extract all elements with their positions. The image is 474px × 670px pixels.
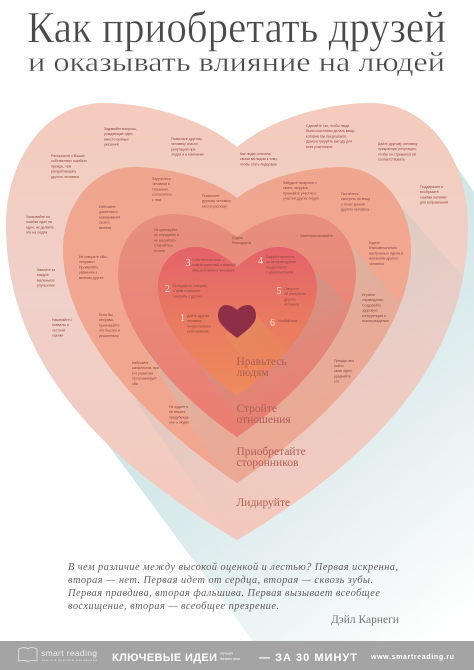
label: win allies: сторонников xyxy=(236,457,299,469)
quote author: Дэйл Карнеги xyxy=(331,614,399,626)
title xyxy=(27,3,446,77)
quote: вторая — нет. Первая идет от сердца, вторая — сквозь зубы. xyxy=(68,575,373,586)
rules 1 to 6: о себе и начните xyxy=(173,289,200,293)
text: second ring notes: Проявляйте xyxy=(79,265,99,269)
text: second ring notes: своего xyxy=(99,221,110,225)
footer slogan: www.smartreading.ru xyxy=(370,654,454,661)
text: second ring notes: Создавайте xyxy=(362,303,381,307)
text: second ring notes: оба xyxy=(132,382,138,386)
label: build relationships: отношения xyxy=(236,414,291,426)
panel: outer heart, lead xyxy=(6,103,468,540)
rules 1 to 6: люди ответят xyxy=(266,265,288,269)
text: outer ring notes: раскритиковать xyxy=(51,170,76,174)
text: outer ring notes: людях и в компании xyxy=(171,153,204,157)
text: second ring notes: Заручитесь xyxy=(152,177,171,181)
text: third ring notes: Будьте xyxy=(232,236,243,240)
icon: core heart xyxy=(218,305,256,338)
text: second ring notes: Избегайте xyxy=(132,361,149,365)
text: second ring notes: навязывания xyxy=(99,215,120,219)
text: second ring notes: благожелательно xyxy=(369,246,397,250)
text: outer ring notes: своим взглядом к тому, xyxy=(240,157,278,161)
text: second ring notes: с точки зрения xyxy=(341,202,365,206)
text: second ring notes: Не судите и xyxy=(169,405,188,409)
text: outer ring notes: вообразите xyxy=(420,190,439,194)
text: second ring notes: предубежде- xyxy=(169,415,191,419)
text: second ring notes: Прежде чем xyxy=(334,359,354,363)
text: outer ring notes: соответствовать xyxy=(378,158,405,162)
text: second ring notes: Пытайтесь xyxy=(341,192,359,196)
text: second ring notes: это быстро и xyxy=(99,329,120,333)
text: outer ring notes: человеку спасти xyxy=(171,142,198,146)
text: third ring notes: не жалуйтесь. xyxy=(154,238,177,242)
rules 1 to 6: об интересах xyxy=(284,292,306,296)
rules 1 to 6: почувствовать xyxy=(187,324,211,328)
footer slogan xyxy=(112,652,454,664)
text: outer ring notes: чтобы он стремился ей xyxy=(378,152,416,156)
text: second ring notes: согласитесь xyxy=(152,193,172,197)
text: third ring notes: благодарны xyxy=(232,241,252,245)
text: third ring notes: Не критикуйте, xyxy=(154,228,178,232)
label: build relationships: Стройте xyxy=(236,403,277,415)
text: outer ring notes: Как лидер сначала xyxy=(240,152,271,156)
text: second ring notes: мести рассказу xyxy=(202,204,227,208)
text: outer ring notes xyxy=(26,124,448,338)
text: second ring notes: своих, загрузке, xyxy=(283,186,309,190)
footer band xyxy=(0,641,474,670)
rules 1 to 6: Дайте другим xyxy=(187,314,209,318)
rules 1 to 6: 6 xyxy=(270,318,275,329)
text: second ring notes: другого человека xyxy=(341,208,369,212)
text: second ring notes: Забудьте на время о xyxy=(283,181,317,185)
text: third ring notes: Заинтересовывайте xyxy=(300,234,333,238)
rules 1 to 6: звук для любого человека xyxy=(192,268,234,272)
text: second ring notes: неправы». xyxy=(79,260,96,264)
quote xyxy=(67,562,398,612)
text: second ring notes: решительно xyxy=(99,334,119,338)
label: win allies: Приобретайте xyxy=(236,446,306,458)
quote: Первая правдива, вторая фальшива. Первая вызывает всеобщее xyxy=(67,588,380,599)
text: third ring notes: понять xyxy=(154,249,165,253)
text: third ring notes: Старайтесь xyxy=(154,244,173,248)
text: second ring notes xyxy=(79,177,403,425)
title: Как приобретать друзей xyxy=(27,3,446,52)
text: second ring notes: свою идею, xyxy=(334,369,353,373)
text: outer ring notes: Сделайте так, чтобы люди xyxy=(306,124,349,128)
footer brand: книги в кратком изложении xyxy=(42,658,97,662)
text: second ring notes: человека в xyxy=(152,182,170,186)
text: second ring notes: Похвалите xyxy=(202,194,219,198)
quote: восхищение, вторая — всеобщее презрение. xyxy=(68,601,279,612)
text: second ring notes: вознаграждения xyxy=(362,319,389,323)
text: outer ring notes: ошибки легкими xyxy=(420,195,446,199)
text: outer ring notes: всех участников xyxy=(306,145,332,149)
text: second ring notes: Не говорите «Вы xyxy=(79,255,107,259)
rules 1 to 6: Прекратите говорить xyxy=(173,284,207,288)
text: outer ring notes: Демонстрируйте выгоду для xyxy=(306,140,352,144)
text: second ring notes: Сказками, xyxy=(152,187,169,191)
text: second ring notes: Если Вы xyxy=(99,313,113,317)
text: second ring notes: желаниям другого xyxy=(369,257,398,261)
text: outer ring notes: были счастливы делать вещи, xyxy=(306,129,355,133)
text: second ring notes: уравняйте xyxy=(334,374,351,378)
text: second ring notes: Будьте xyxy=(369,241,380,245)
text: second ring notes: с ним xyxy=(152,198,162,202)
text: outer ring notes: улучшение xyxy=(37,284,55,288)
text: outer ring notes: рождающие идеи, xyxy=(104,132,133,136)
text: outer ring notes: собственных ошибках xyxy=(51,159,87,163)
rules 1 to 6: другого xyxy=(284,297,296,301)
text: second ring notes: найти xyxy=(334,364,343,368)
text: second ring notes: участии других людей xyxy=(283,197,319,201)
text: second ring notes: давления и xyxy=(99,210,118,214)
text: outer ring notes: Дайте другому человеку xyxy=(378,142,418,146)
panel: second heart, allies xyxy=(63,167,411,483)
text: outer ring notes: каждое xyxy=(37,273,49,277)
text: outer ring notes: прекрасную репутацию, xyxy=(378,147,417,151)
text: second ring notes: уважение к xyxy=(79,271,98,275)
text: second ring notes: конкуренцию и xyxy=(362,314,386,318)
rules 1 to 6: 1 xyxy=(180,313,185,324)
footer slogan: — ЗА 30 МИНУТ xyxy=(259,652,357,664)
text: outer ring notes: Указывайте на xyxy=(26,215,50,219)
text: outer ring notes: Поддержите и xyxy=(420,185,443,189)
long shadow of the heart xyxy=(60,167,474,641)
rules 1 to 6: 2 xyxy=(165,284,170,295)
rules 1 to 6: говорить о других xyxy=(173,294,202,298)
panel: fourth heart, be liked xyxy=(158,247,317,396)
text: outer ring notes: ошибки один на xyxy=(26,220,52,224)
text: outer ring notes: чтобы стать лидерами xyxy=(240,162,277,166)
rules 1 to 6: Собственное имя — xyxy=(192,258,225,262)
rules 1 to 6: Улыбайтесь xyxy=(278,319,298,323)
rules 1 to 6: самый приятный и важный xyxy=(192,263,236,267)
text: second ring notes: настроены к идеям и xyxy=(369,251,403,255)
text: outer ring notes: один, не делайте xyxy=(26,225,54,229)
text: second ring notes: не важите, xyxy=(169,410,186,414)
text: outer ring notes: честной xyxy=(52,328,65,332)
label: be liked: Нравьтесь xyxy=(236,356,287,368)
rules 1 to 6: себя важным xyxy=(187,330,209,334)
text: second ring notes: его развитии xyxy=(132,371,153,375)
footer slogan: КЛЮЧЕВЫЕ ИДЕИ xyxy=(112,652,217,664)
text: second ring notes: мнению других xyxy=(79,276,104,280)
text: second ring notes: другому человеку xyxy=(202,199,231,203)
label: lead: Лидируйте xyxy=(236,497,290,509)
rules 1 to 6 xyxy=(165,255,306,334)
text: outer ring notes: репутацию при xyxy=(171,147,195,151)
footer slogan: бизнес книг xyxy=(220,657,241,661)
text: outer ring notes: вместо прямых xyxy=(104,137,129,141)
text: second ring notes: смотреть на вещи xyxy=(341,197,370,201)
text: second ring notes: неправы, xyxy=(99,318,114,322)
footer brand: smart reading xyxy=(41,648,97,658)
rules 1 to 6: человеку xyxy=(187,319,202,323)
rules 1 to 6: 5 xyxy=(276,286,282,297)
text: outer ring notes: которые Вы предлагаете. xyxy=(306,134,347,138)
rules 1 to 6: Задайте вопросы, xyxy=(266,255,295,259)
text: second ring notes: его. xyxy=(334,379,340,383)
text: outer ring notes: для исправления xyxy=(420,201,448,205)
text: outer ring notes: маленькое xyxy=(37,278,55,282)
quote: В чем различие между высокой оценкой и лестью? Первая искренна, xyxy=(68,562,398,573)
rules 1 to 6: на которые другие xyxy=(266,260,296,264)
footer slogan: лучших xyxy=(220,652,233,656)
text: second ring notes: здоровую xyxy=(362,309,378,313)
text: outer ring notes: другого человека xyxy=(51,175,79,179)
text: second ring notes: Играйте xyxy=(362,293,375,297)
title: и оказывать влияние на людей xyxy=(28,47,445,77)
text: second ring notes: Избегайте xyxy=(99,205,116,209)
text: third ring notes: не осуждайте и xyxy=(154,233,179,237)
text: outer ring notes: это на людях xyxy=(26,231,48,235)
text: outer ring notes: Хвалите за xyxy=(37,268,55,272)
text: outer ring notes: Расскажите о Ваших xyxy=(51,154,85,158)
text: third ring notes xyxy=(154,228,333,253)
rules 1 to 6: 4 xyxy=(258,256,263,267)
rules 1 to 6: Говорите xyxy=(284,287,299,291)
icon: open book xyxy=(18,648,37,662)
text: second ring notes: ние о людях xyxy=(169,421,189,425)
text: outer ring notes: Задавайте вопросы, xyxy=(104,127,137,131)
text: outer ring notes: Начинайте с xyxy=(52,318,72,322)
text: second ring notes: программирует xyxy=(132,377,157,381)
panel: third heart, relationships xyxy=(118,214,356,437)
rules 1 to 6: с удовольствием xyxy=(266,271,294,275)
text: second ring notes: признайте участие в xyxy=(283,191,316,195)
text: outer ring notes: Позвольте другому xyxy=(171,137,202,141)
text: second ring notes: человека xyxy=(369,262,384,266)
text: outer ring notes: прежде, чем xyxy=(51,164,72,168)
text: second ring notes: мнения xyxy=(99,226,111,230)
text: outer ring notes: указаний xyxy=(104,143,119,147)
text: second ring notes: конфликтов, при xyxy=(132,366,159,370)
text: outer ring notes: похвалы и xyxy=(52,323,69,327)
text: outer ring notes: оценки xyxy=(52,334,63,338)
text: second ring notes: справедливо. xyxy=(362,298,384,302)
label: be liked: людям xyxy=(236,367,269,379)
text: second ring notes: признавайте xyxy=(99,323,120,327)
rules 1 to 6: 3 xyxy=(186,258,190,269)
rules 1 to 6: человека xyxy=(284,303,299,307)
